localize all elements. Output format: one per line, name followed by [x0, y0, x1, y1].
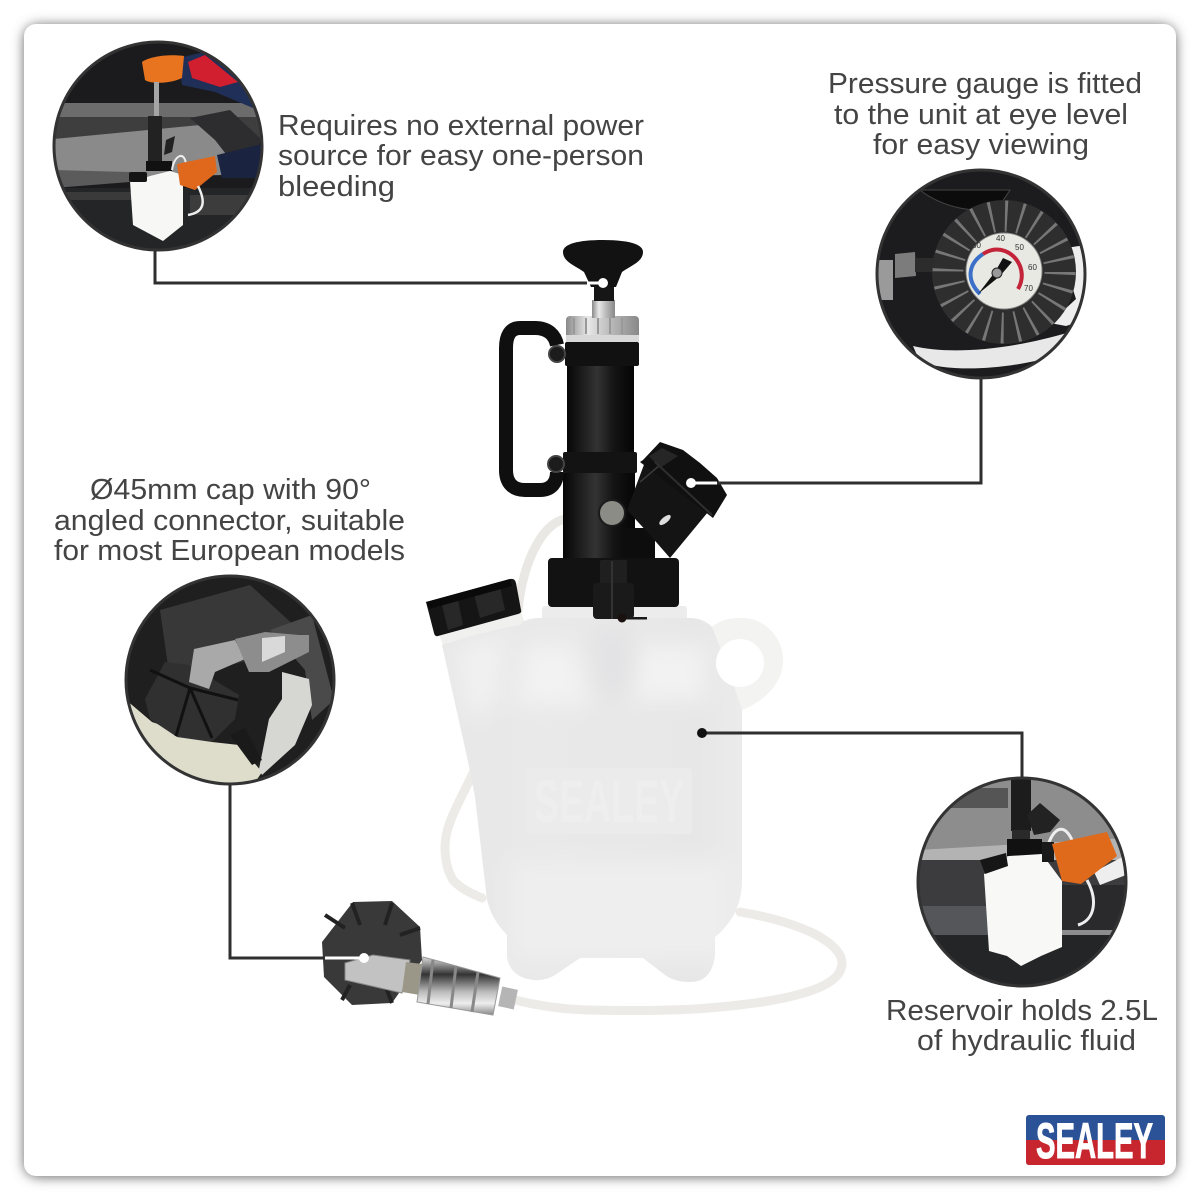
text: no external power: Requires no external power — [278, 110, 644, 142]
photo: one-person bleeding — [54, 42, 262, 250]
plunger knob — [563, 240, 643, 287]
fluid hose — [445, 773, 842, 1011]
text: no external power — [278, 110, 644, 203]
reservoir jug — [442, 618, 783, 982]
text: pressure gauge — [828, 68, 1142, 161]
photo: pressure gauge: 60 — [1028, 263, 1037, 272]
quick coupler — [417, 957, 500, 1015]
nut — [402, 962, 422, 995]
plunger rod — [592, 285, 615, 318]
text: cap and connector: for most European models — [54, 535, 405, 567]
gauge housing — [627, 442, 727, 558]
elbow block — [345, 955, 410, 993]
connector hose tail — [498, 987, 518, 1009]
pump bands — [565, 342, 639, 366]
text: no external power: source for easy one-person — [278, 140, 644, 172]
text: pressure gauge: Pressure gauge is fitted — [828, 68, 1142, 100]
text: reservoir capacity: of hydraulic fluid — [917, 1025, 1136, 1057]
leader dots — [359, 278, 707, 963]
reservoir neck — [542, 606, 687, 622]
jug moulding highlights — [476, 618, 740, 700]
text: cap and connector — [54, 474, 405, 567]
text: pressure gauge: to the unit at eye level — [834, 99, 1128, 131]
embossed logo: SEALEY — [534, 768, 684, 835]
photo: angled connector — [126, 576, 334, 790]
side handle — [506, 328, 565, 490]
bleed screw — [599, 500, 625, 526]
text: cap and connector: angled connector, suitable — [54, 505, 405, 537]
silver collar — [566, 316, 639, 342]
photo: pressure gauge — [877, 170, 1085, 378]
photo: pressure gauge: 70 — [1024, 284, 1033, 293]
text: reservoir capacity — [886, 995, 1158, 1057]
top tube loop — [518, 519, 614, 612]
photo: reservoir — [918, 778, 1126, 990]
jug handle hole — [716, 639, 764, 687]
filler cap — [426, 579, 521, 636]
text: pressure gauge: for easy viewing — [873, 129, 1089, 161]
connector cap — [322, 901, 422, 1005]
circle rings — [54, 42, 1126, 986]
embossed logo — [526, 768, 692, 835]
base collar — [548, 558, 679, 607]
text: no external power: bleeding — [278, 171, 395, 203]
pump cylinder — [563, 473, 635, 563]
photo: pressure gauge: 50 — [1015, 243, 1024, 252]
product: brake bleeder — [322, 240, 842, 1015]
filler neck — [438, 610, 526, 650]
valve — [593, 560, 647, 620]
text: cap and connector: Ø45mm cap with 90° — [90, 474, 371, 506]
photo: pressure gauge: 40 — [996, 234, 1005, 243]
text: reservoir capacity: Reservoir holds 2.5L — [886, 995, 1158, 1027]
gauge stem — [623, 528, 655, 562]
leader lines — [155, 248, 1022, 958]
photo: pressure gauge: 30 — [972, 241, 981, 250]
